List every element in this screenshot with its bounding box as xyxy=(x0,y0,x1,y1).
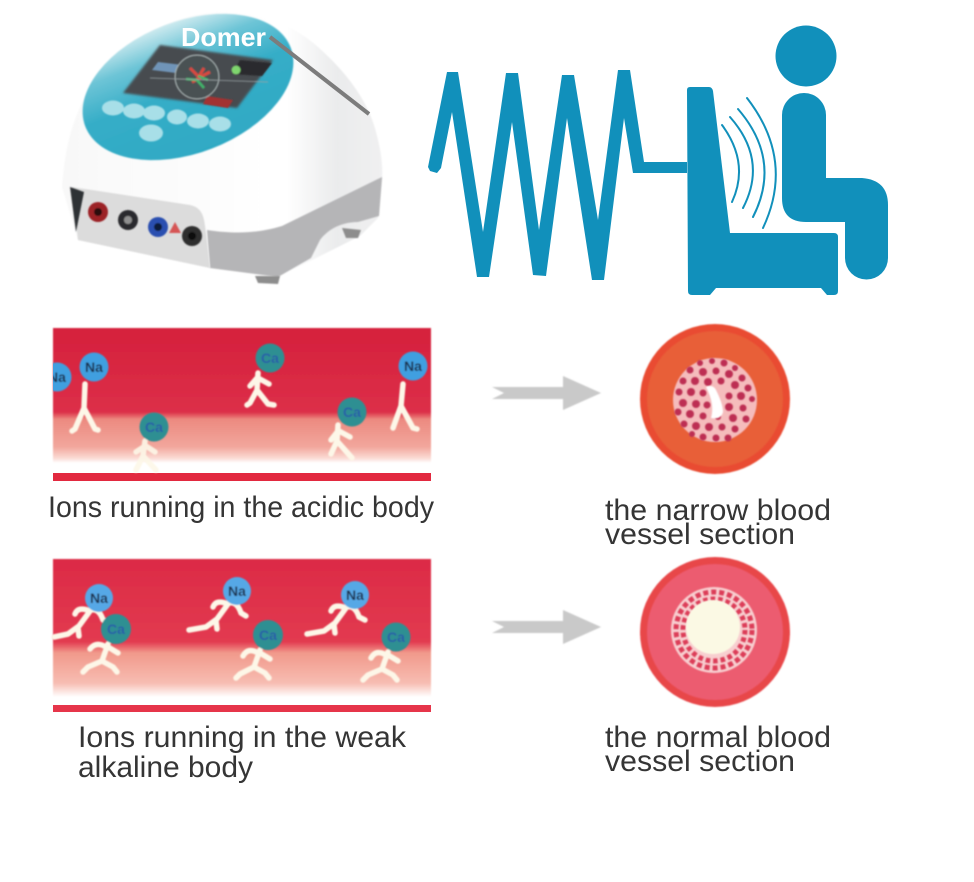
running ions: Na xyxy=(228,583,246,599)
caption: normal vessel: vessel section xyxy=(605,745,795,778)
connector jacks xyxy=(88,202,202,246)
running ions xyxy=(54,577,410,680)
narrow blood vessel section xyxy=(640,324,790,474)
person body xyxy=(782,93,888,280)
open lumen xyxy=(686,600,740,654)
device photo xyxy=(62,0,382,284)
cell ring xyxy=(671,587,757,673)
running ions: Ca xyxy=(387,629,405,645)
panel: ions in acidic body xyxy=(42,328,431,481)
arrow: acidic to narrow xyxy=(492,376,601,410)
display screen xyxy=(123,45,273,108)
walking ions xyxy=(42,344,428,470)
device body xyxy=(62,12,382,277)
panel: ions in weak alkaline body xyxy=(53,559,431,712)
wave signal xyxy=(428,70,687,280)
caption: weak alkaline body: alkaline body xyxy=(78,751,253,784)
caption: normal vessel: the normal blood xyxy=(605,721,831,754)
caption: weak alkaline body xyxy=(78,721,407,784)
vessel wall xyxy=(640,324,790,474)
bottom bar xyxy=(53,705,431,712)
brand label: Domer xyxy=(181,22,266,52)
red background xyxy=(53,559,431,697)
icon: waveform to seated person xyxy=(428,26,888,295)
grey base xyxy=(207,177,382,277)
control panel ellipse xyxy=(62,0,314,188)
running ions: Na xyxy=(346,587,364,603)
panel buttons xyxy=(102,100,231,142)
walking ions: Ca xyxy=(145,419,163,435)
caption: weak alkaline body: Ions running in the weak xyxy=(78,721,407,754)
walking ions: Na xyxy=(48,369,66,385)
white crescent opening xyxy=(706,386,723,418)
brand leader line xyxy=(270,37,369,114)
caption: normal vessel xyxy=(605,721,831,778)
arrow: alkaline to normal xyxy=(492,610,601,644)
walking ions: Na xyxy=(85,359,103,375)
running ions: Ca xyxy=(107,621,125,637)
caption: narrow vessel: the narrow blood xyxy=(605,494,831,527)
chair xyxy=(687,87,838,295)
bottom bar xyxy=(53,473,431,481)
feet xyxy=(255,228,361,284)
walking ions: Na xyxy=(404,358,422,374)
red background xyxy=(53,328,431,473)
front connector plate xyxy=(72,187,210,268)
running ions: Ca xyxy=(259,627,277,643)
plate dark recess xyxy=(70,187,84,232)
normal blood vessel section xyxy=(640,557,790,707)
display details xyxy=(150,55,272,108)
caption: narrow vessel: vessel section xyxy=(605,518,795,551)
caption: narrow vessel xyxy=(605,494,831,551)
caption: acidic body: Ions running in the acidic body xyxy=(48,491,434,524)
blood cells xyxy=(674,358,755,442)
vessel wall xyxy=(640,557,790,707)
walking ions: Ca xyxy=(261,350,279,366)
running ions: Na xyxy=(90,590,108,606)
walking ions: Ca xyxy=(343,404,361,420)
person head xyxy=(776,26,836,86)
vibration arcs xyxy=(722,98,776,228)
narrowed lumen xyxy=(673,358,757,442)
